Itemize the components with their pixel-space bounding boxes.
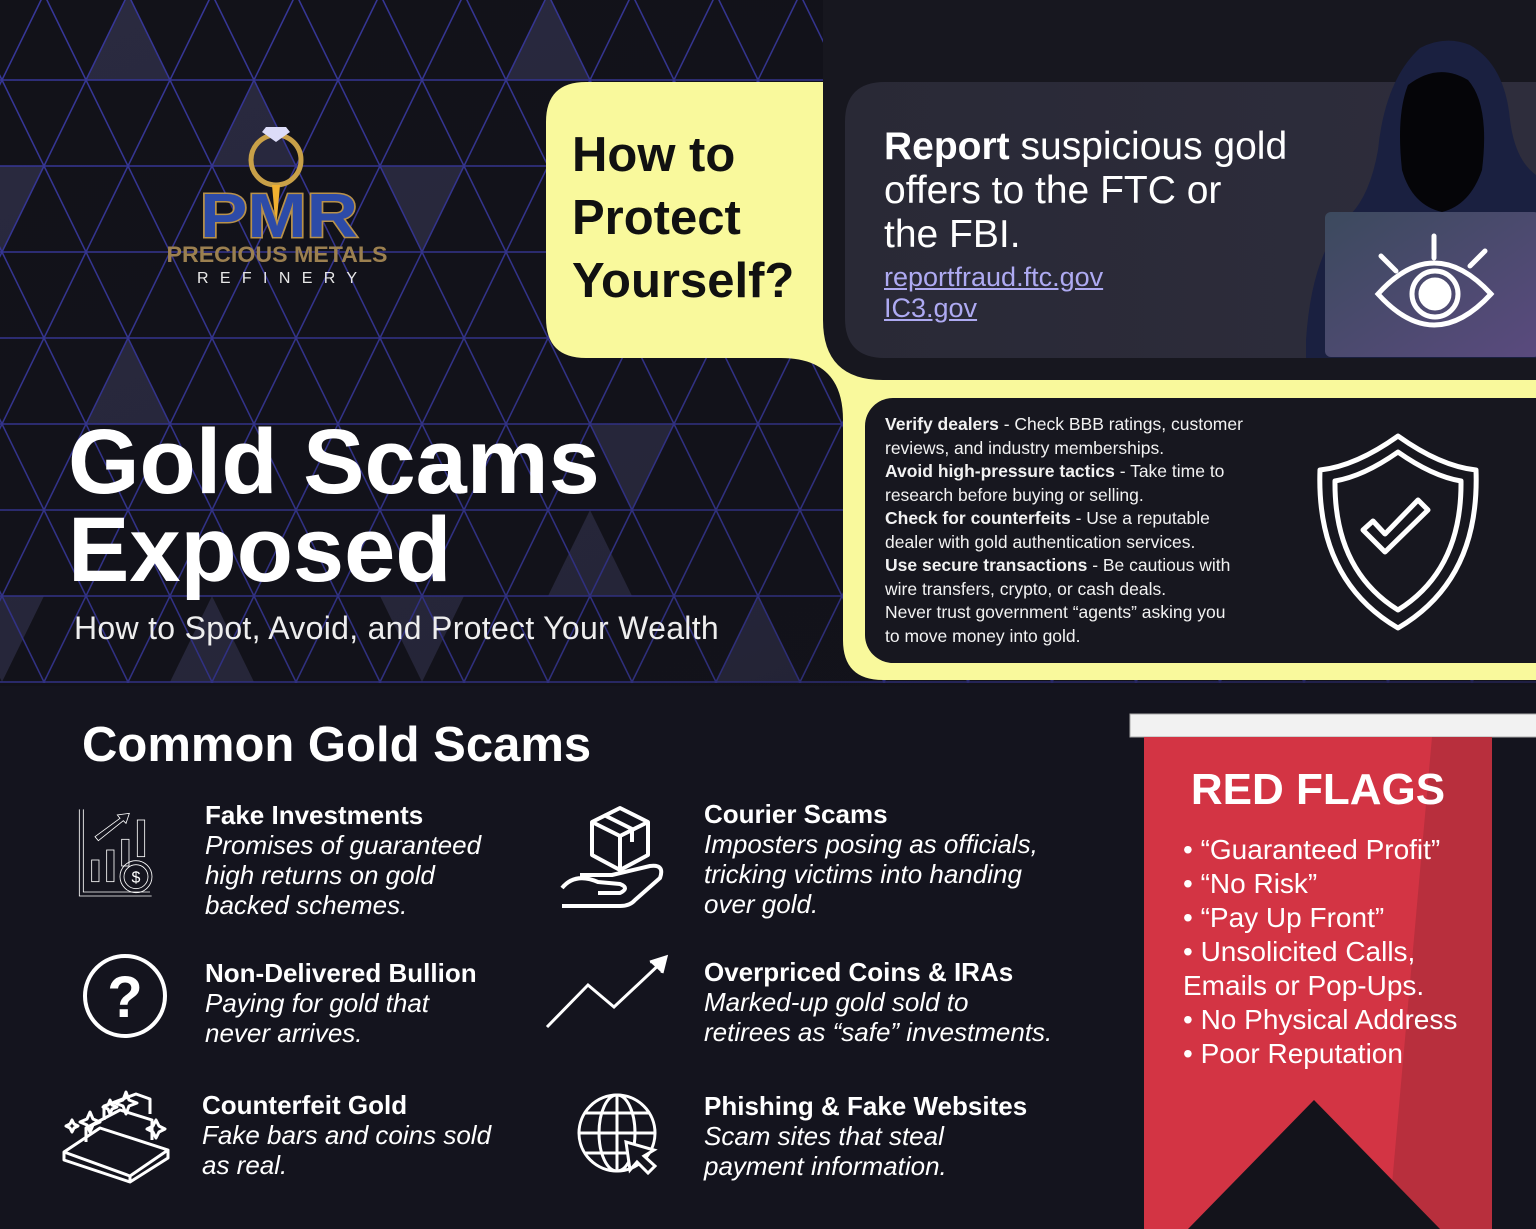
scam: phishing: Scam sites that steal <box>704 1121 944 1151</box>
text: report: Report suspicious gold <box>884 125 1287 168</box>
scam: fake investments: backed schemes. <box>205 890 407 920</box>
red flags list: • “Pay Up Front” <box>1183 902 1384 933</box>
text: protection tips: reviews, and industry memberships. <box>885 438 1164 458</box>
links <box>884 262 1104 323</box>
scam: courier scams: over gold. <box>704 889 818 919</box>
icon: gold bars <box>64 1092 168 1182</box>
logo: PMR <box>200 182 358 251</box>
scam: overpriced coins: Marked-up gold sold to <box>704 987 968 1017</box>
scam: non-delivered bullion: Paying for gold that <box>205 988 429 1018</box>
scam: courier scams: Imposters posing as officials, <box>704 829 1038 859</box>
scam: counterfeit gold: Counterfeit Gold <box>202 1090 407 1120</box>
scam: fake investments <box>205 800 482 920</box>
title: Gold Scams <box>68 411 600 513</box>
scam: courier scams: Courier Scams <box>704 799 888 829</box>
hacker illustration <box>1306 41 1536 358</box>
red flags list: • Unsolicited Calls, <box>1183 936 1415 967</box>
red flags list: • No Physical Address <box>1183 1004 1457 1035</box>
text: report: offers to the FTC or <box>884 169 1221 212</box>
text: protection tips: dealer with gold authentication services. <box>885 532 1195 552</box>
text: protection tips: to move money into gold. <box>885 626 1081 646</box>
heading: red flags: RED FLAGS <box>1191 765 1445 814</box>
logo <box>166 127 388 287</box>
icon: shield check <box>1320 436 1476 628</box>
scam: counterfeit gold <box>202 1090 492 1180</box>
scam: phishing: payment information. <box>704 1151 947 1181</box>
icon: courier box in hand <box>562 808 661 906</box>
icon: fake investments chart: $ <box>132 870 141 887</box>
icon: fake investments chart <box>79 809 152 896</box>
scam: counterfeit gold: Fake bars and coins sold <box>202 1120 491 1150</box>
yellow frame <box>546 82 1536 680</box>
icon: trend arrow <box>547 957 666 1027</box>
scam: phishing <box>703 1091 1027 1181</box>
scam: non-delivered bullion: Non-Delivered Bullion <box>205 958 477 988</box>
scam: courier scams <box>704 799 1038 919</box>
text: protection tips: wire transfers, crypto, or cash deals. <box>885 578 1166 598</box>
heading: How to Protect Yourself: How to <box>572 128 735 182</box>
title <box>68 411 600 601</box>
scam: counterfeit gold: as real. <box>202 1150 287 1180</box>
red flags banner <box>1130 714 1536 1229</box>
scam: overpriced coins: Overpriced Coins & IRAs <box>704 957 1013 987</box>
icon: globe with cursor <box>579 1095 655 1173</box>
text: report <box>884 125 1287 256</box>
icon: eye <box>1378 236 1491 325</box>
text: protection tips: Verify dealers - Check BBB ratings, customer <box>885 414 1243 434</box>
scam: non-delivered bullion <box>205 958 477 1048</box>
red flags list: • Poor Reputation <box>1183 1038 1403 1069</box>
scam: courier scams: tricking victims into handing <box>704 859 1022 889</box>
scam: phishing: Phishing & Fake Websites <box>704 1091 1027 1121</box>
scam: fake investments: high returns on gold <box>205 860 435 890</box>
outer dark report frame <box>823 0 1536 380</box>
heading: How to Protect Yourself: Protect <box>572 191 741 245</box>
heading: common gold scams: Common Gold Scams <box>82 718 591 772</box>
scam: overpriced coins <box>704 957 1052 1047</box>
scam: overpriced coins: retirees as “safe” investments. <box>704 1017 1052 1047</box>
text: protection tips: Avoid high-pressure tactics - Take time to <box>885 461 1224 481</box>
tips panel <box>865 398 1536 663</box>
links: reportfraud.ftc.gov <box>884 262 1103 292</box>
scam: fake investments: Fake Investments <box>205 800 423 830</box>
red flags list: • “Guaranteed Profit” <box>1183 834 1440 865</box>
text: protection tips: Never trust government “agents” asking you <box>885 602 1225 622</box>
icon: question circle: ? <box>107 965 143 1030</box>
text: protection tips: Check for counterfeits - Use a reputable <box>885 508 1210 528</box>
report panel <box>845 82 1536 358</box>
scam: non-delivered bullion: never arrives. <box>205 1018 362 1048</box>
red flags list: Emails or Pop-Ups. <box>1183 970 1424 1001</box>
red flags list <box>1183 834 1457 1069</box>
heading: How to Protect Yourself <box>572 128 794 308</box>
text: protection tips: Use secure transactions - Be cautious with <box>885 555 1230 575</box>
red flags list: • “No Risk” <box>1183 868 1317 899</box>
text: protection tips: research before buying or selling. <box>885 484 1144 504</box>
text: report: the FBI. <box>884 213 1021 256</box>
text: protection tips <box>885 414 1243 646</box>
icon: question circle <box>85 956 165 1036</box>
logo: REFINERY <box>197 270 357 287</box>
title: Exposed <box>68 499 451 601</box>
subtitle: How to Spot, Avoid, and Protect Your Wealth <box>74 610 719 646</box>
heading: How to Protect Yourself: Yourself? <box>572 254 794 308</box>
logo: PRECIOUS METALS <box>166 242 388 267</box>
links: IC3.gov <box>884 293 977 323</box>
scam: fake investments: Promises of guaranteed <box>205 830 481 860</box>
triangle pattern <box>0 0 1536 686</box>
